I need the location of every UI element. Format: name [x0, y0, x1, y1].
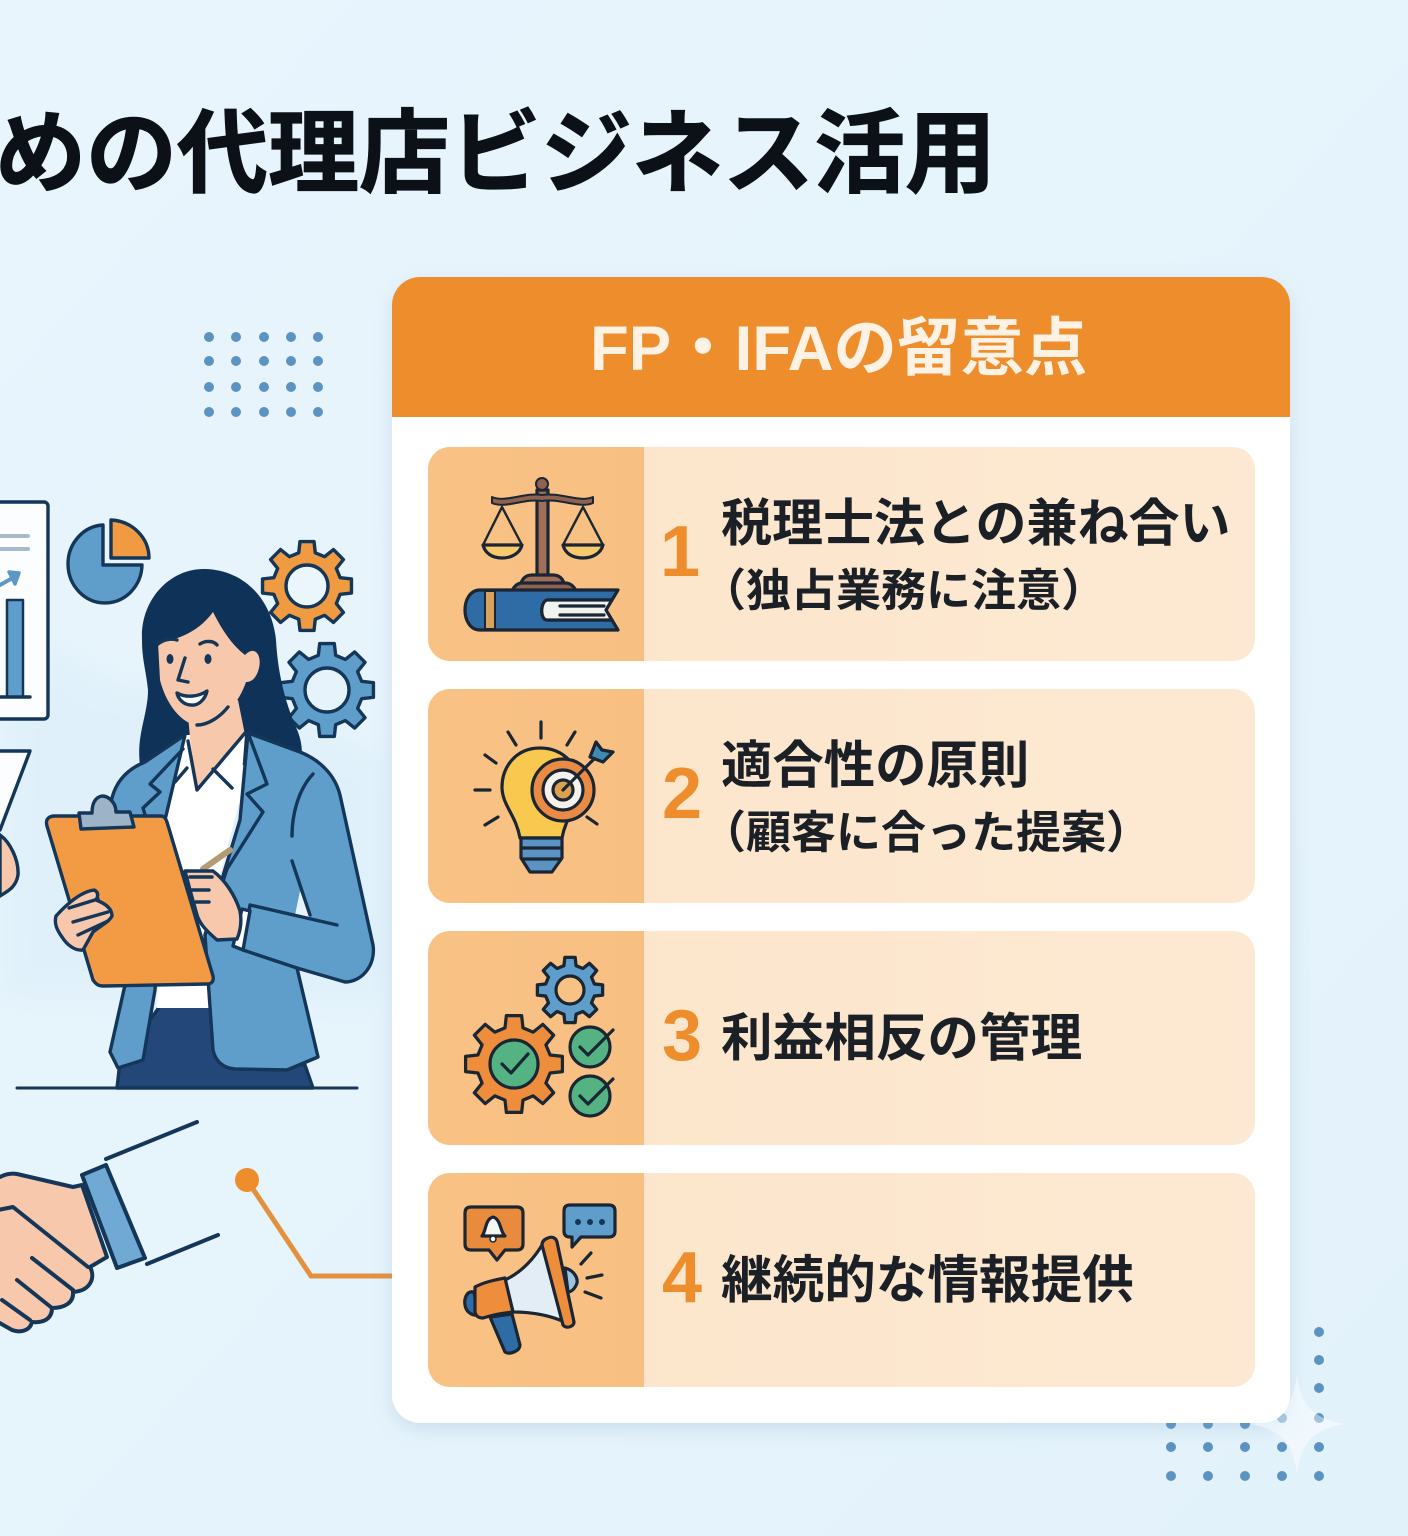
row 3 label: 利益相反の管理	[721, 1009, 1082, 1067]
row 2	[428, 689, 1255, 903]
illustration: businesswoman	[17, 569, 373, 1088]
row 1	[428, 447, 1255, 661]
panel header	[392, 277, 1290, 417]
row 1 label	[701, 495, 1230, 616]
illustration: partial hand	[0, 835, 18, 896]
number 3: 3	[662, 996, 702, 1076]
connector line	[235, 1168, 392, 1276]
decorative dots: bottom right	[1166, 1327, 1324, 1481]
icon: light bulb with target	[475, 722, 613, 872]
row 2 label: （顧客に合った提案）	[701, 807, 1151, 858]
illustration: second sheet	[0, 751, 30, 830]
illustration: chart card	[0, 502, 48, 719]
title: めの代理店ビジネス活用	[0, 104, 996, 205]
row 1 label: 税理士法との兼ね合い	[721, 495, 1230, 552]
number 4: 4	[662, 1238, 702, 1318]
illustration: blue gear	[281, 644, 373, 736]
sparkle	[1250, 1375, 1344, 1474]
illustration: orange gear	[263, 542, 351, 630]
panel: FP・IFA notes	[392, 277, 1290, 1423]
number 1: 1	[660, 512, 700, 592]
illustration: pie chart	[68, 520, 149, 603]
number 2: 2	[662, 754, 702, 834]
row 4	[428, 1173, 1255, 1387]
row 1 label: （独占業務に注意）	[701, 565, 1106, 616]
icon: scales on book	[465, 478, 618, 630]
row 4 label: 継続的な情報提供	[721, 1251, 1134, 1309]
row 3	[428, 931, 1255, 1145]
icon: gears and checks	[466, 957, 613, 1116]
icon: megaphone and bubbles	[465, 1205, 615, 1353]
panel header: FP・IFAの留意点	[590, 314, 1087, 384]
decorative dots: top	[204, 332, 323, 417]
row 2 label	[701, 736, 1151, 858]
row 2 label: 適合性の原則	[721, 736, 1029, 794]
illustration: handshake	[0, 1122, 218, 1331]
